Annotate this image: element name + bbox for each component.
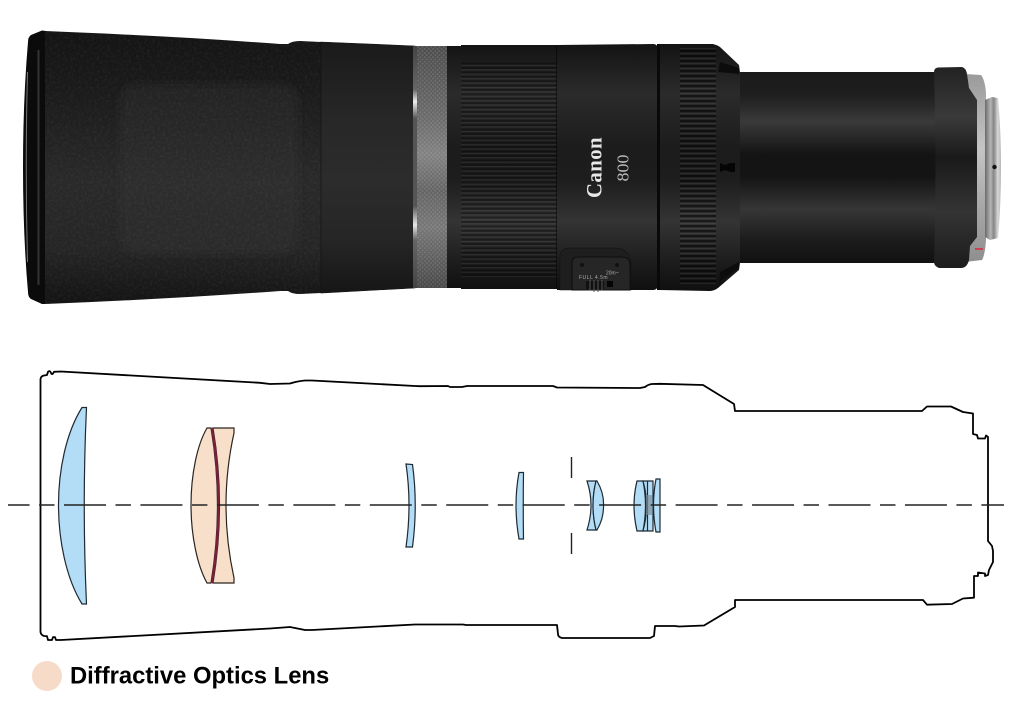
barrel with Canon logo xyxy=(557,44,657,290)
rear rubber collar xyxy=(934,67,977,268)
lens barrel outline xyxy=(40,371,993,640)
diffractive layer xyxy=(212,428,218,583)
switch labels: FULL 4.5m xyxy=(579,275,608,281)
legend swatch xyxy=(32,661,62,691)
panel: lens photograph xyxy=(23,30,1001,305)
leather grip section xyxy=(45,30,321,305)
black band xyxy=(447,46,461,288)
smooth barrel section xyxy=(321,42,415,293)
focus limiter switch xyxy=(586,280,613,292)
diffractive optics lens xyxy=(191,428,234,583)
mount screw xyxy=(992,165,997,169)
red mount index xyxy=(975,248,983,250)
lens element 4 xyxy=(516,472,524,539)
rear tube xyxy=(740,72,940,263)
lens front ring xyxy=(23,30,46,304)
Canon logo: Canon xyxy=(582,137,606,198)
silver lens mount xyxy=(965,74,1001,262)
knurled grey control ring xyxy=(417,46,447,288)
groove between barrel and rear ring xyxy=(657,44,660,290)
lens element 3 xyxy=(406,464,415,547)
aperture stop marker xyxy=(570,457,572,554)
ribbed focus ring xyxy=(461,45,558,289)
lens group 5 xyxy=(587,481,604,530)
control ring silver edge xyxy=(413,46,417,288)
focal length 800: 800 xyxy=(614,154,632,182)
optical axis xyxy=(8,504,1004,506)
switch panel xyxy=(560,248,631,292)
front lens element xyxy=(58,408,86,604)
lens group 6 xyxy=(634,479,660,532)
rear ribbed ring and cone xyxy=(660,44,740,291)
legend xyxy=(32,661,329,691)
legend label: Diffractive Optics Lens xyxy=(70,662,329,690)
switch panel: 20m~ xyxy=(606,270,619,276)
diagram: lens cross-section xyxy=(8,371,1004,640)
